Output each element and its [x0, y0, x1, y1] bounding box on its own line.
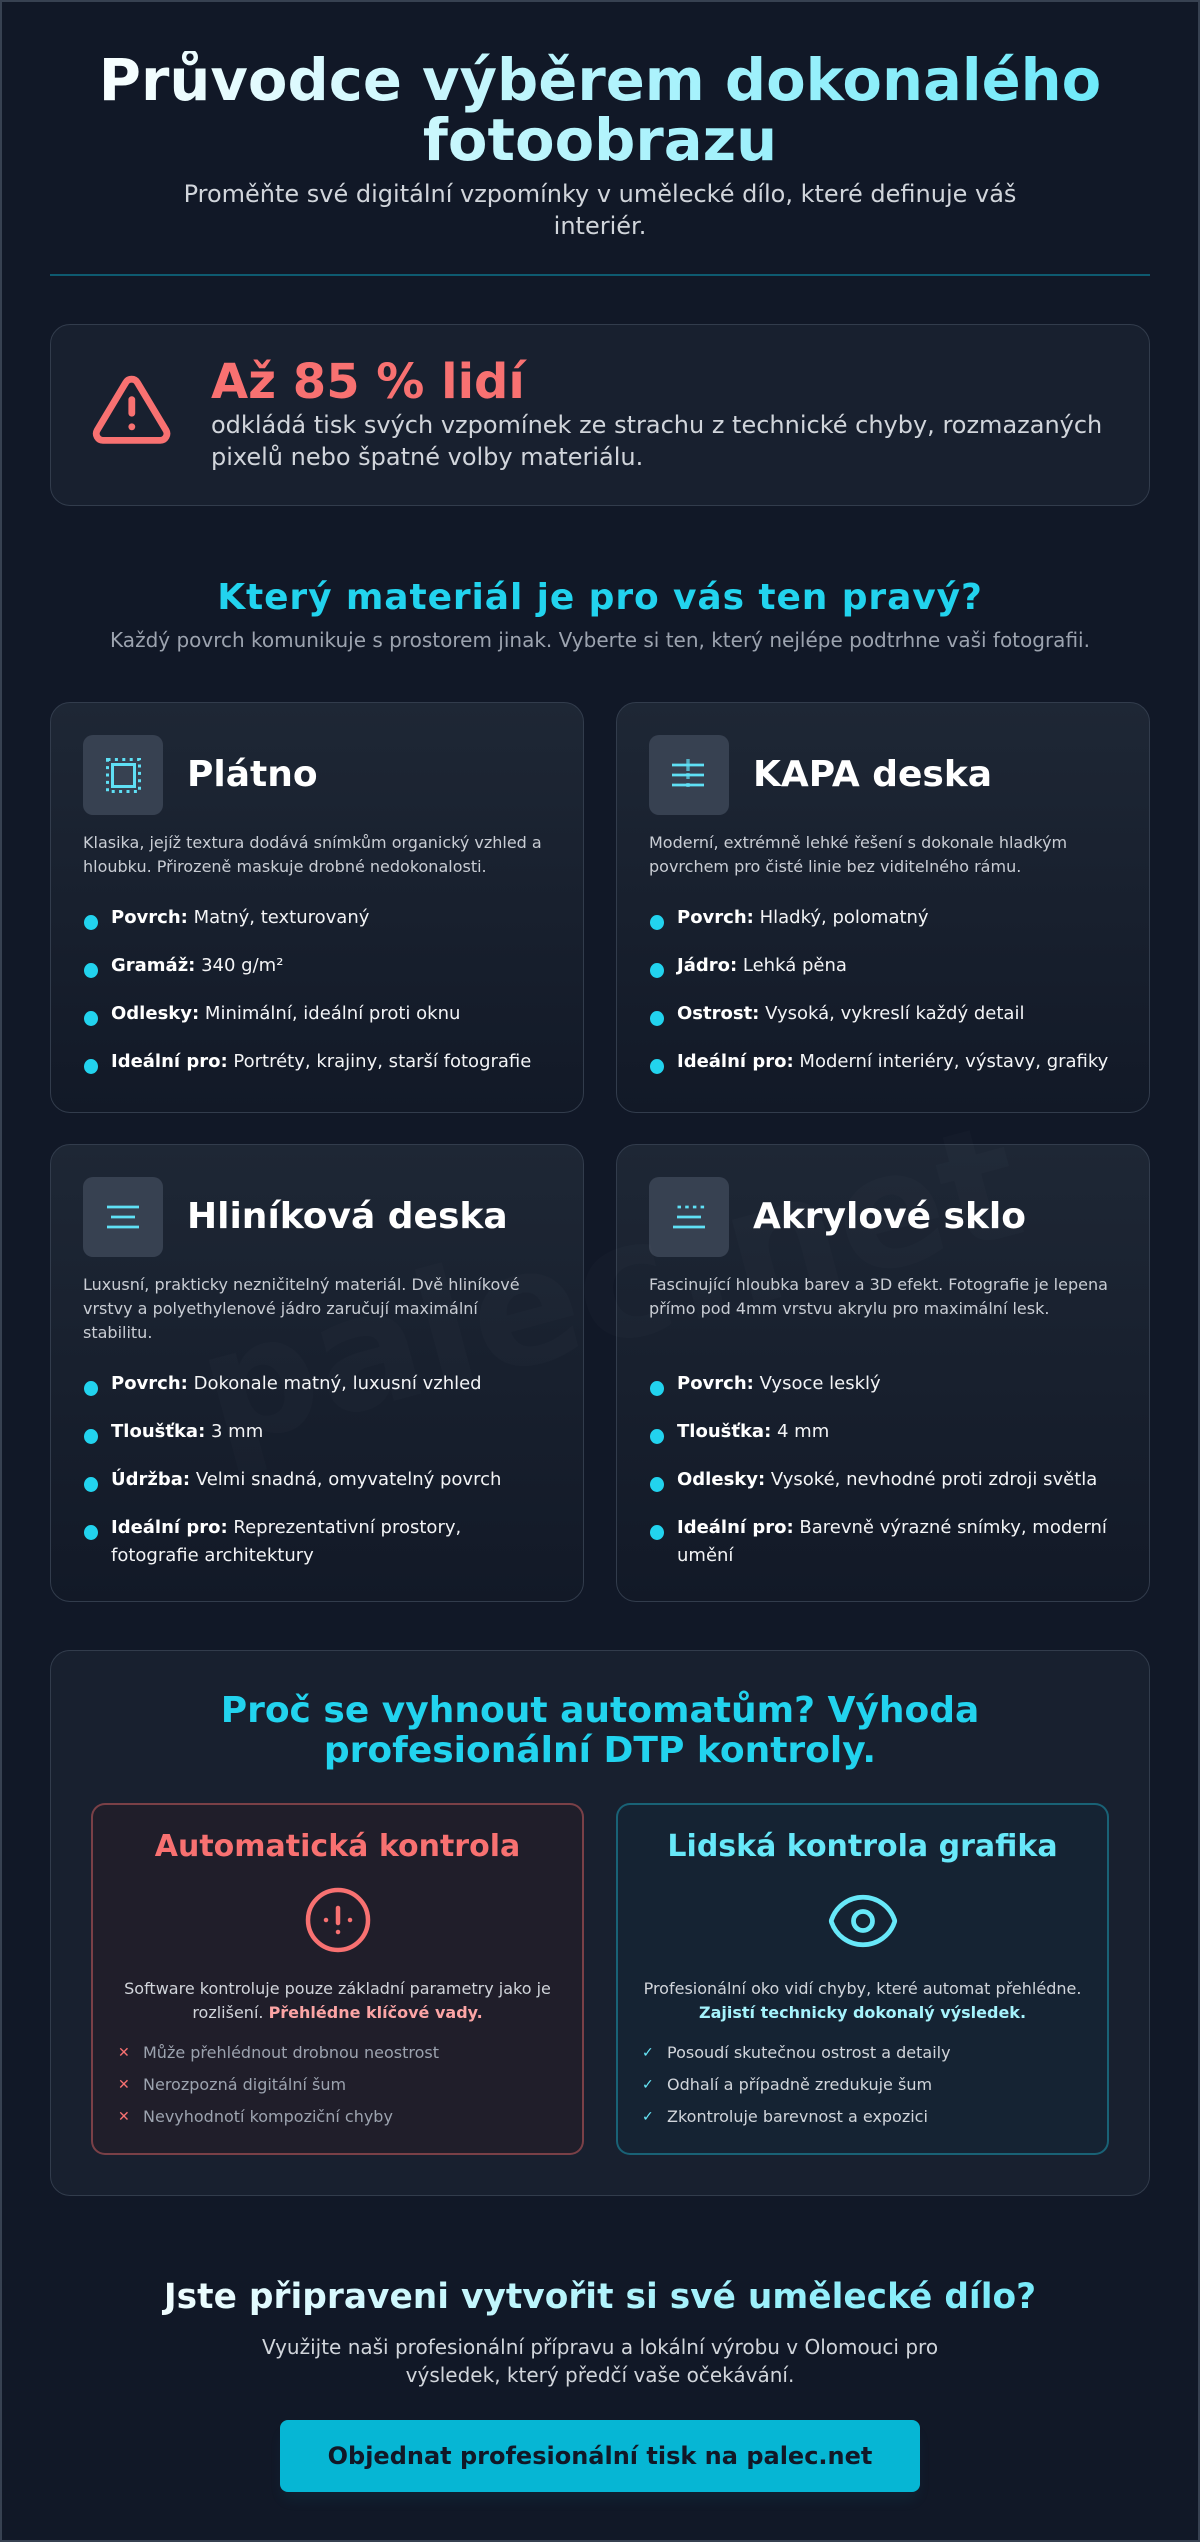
- spec: thickness: Tloušťka: 4 mm: [677, 1421, 829, 1442]
- body text: Profesionální oko vidí chyby, které automat přehlédne.: [644, 1979, 1081, 1998]
- card title: Plátno: [187, 754, 318, 795]
- spec: surface: Povrch: Dokonale matný, luxusní vzhled: [111, 1373, 482, 1394]
- spec: ideal for: Ideální pro: Portréty, krajiny, starší fotografie: [111, 1051, 531, 1072]
- description: [649, 1275, 1108, 1318]
- benefit 2: Odhalí a případně zredukuje šum: [667, 2075, 932, 2094]
- benefit 1: Posoudí skutečnou ostrost a detaily: [667, 2043, 951, 2062]
- spec: ideal for: fotografie architektury: [111, 1545, 314, 1566]
- closing heading: Jste připraveni vytvořit si své umělecké dílo?: [164, 2277, 1036, 2317]
- icon: acrylic layers: [649, 1177, 729, 1257]
- statistic text: odkládá tisk svých vzpomínek ze strachu z technické chyby, rozmazaných: [211, 411, 1102, 439]
- icon: canvas: [83, 735, 163, 815]
- spec: maintenance: Údržba: Velmi snadná, omyvatelný povrch: [111, 1469, 501, 1490]
- description: [83, 833, 542, 876]
- spec: ideal for: umění: [677, 1545, 733, 1566]
- statistic text: pixelů nebo špatné volby materiálu.: [211, 443, 643, 471]
- drawback 1: Může přehlédnout drobnou neostrost: [143, 2043, 439, 2062]
- body text: [644, 1979, 1081, 2022]
- description: vrstvy a polyethylenové jádro zaručují maximální: [83, 1299, 478, 1318]
- panel: automatic check: ✕: [118, 2109, 130, 2125]
- panel: human check: [616, 1803, 1109, 2155]
- drawback 3: Nevyhodnotí kompoziční chyby: [143, 2107, 393, 2126]
- spec: surface: Povrch: Matný, texturovaný: [111, 907, 369, 928]
- call to action button: [280, 2420, 920, 2492]
- description: povrchem pro čisté linie bez viditelného rámu.: [649, 857, 1021, 876]
- panel: comparison: [50, 1650, 1150, 2196]
- benefit 3: Zkontroluje barevnost a expozici: [667, 2107, 928, 2126]
- description: hloubku. Přirozeně maskuje drobné nedokonalosti.: [83, 857, 487, 876]
- spec: surface: Povrch: Hladký, polomatný: [677, 907, 929, 928]
- description: přímo pod 4mm vrstvu akrylu pro maximální lesk.: [649, 1299, 1049, 1318]
- comparison heading: [221, 1690, 979, 1771]
- statistic text: [211, 411, 1102, 471]
- panel: automatic check: ✕: [118, 2077, 130, 2093]
- title: Průvodce výběrem dokonalého: [99, 47, 1101, 114]
- icon: aluminium layers: [83, 1177, 163, 1257]
- panel: statistic alert: [50, 324, 1150, 506]
- subtitle: [184, 180, 1016, 240]
- comparison heading: profesionální DTP kontroly.: [324, 1730, 876, 1771]
- spec: thickness: Tloušťka: 3 mm: [111, 1421, 263, 1442]
- spec: core: Jádro: Lehká pěna: [677, 955, 847, 976]
- body text: Software kontroluje pouze základní parametry jako je: [124, 1979, 551, 1998]
- panel: automatic check: [91, 1803, 584, 2155]
- panel: KAPA board: [616, 702, 1150, 1113]
- body text: rozlišení. Přehlédne klíčové vady.: [192, 2003, 483, 2022]
- body text: [124, 1979, 551, 2022]
- drawback 2: Nerozpozná digitální šum: [143, 2075, 346, 2094]
- subtitle: interiér.: [554, 212, 646, 240]
- icon: KAPA layers: [649, 735, 729, 815]
- comparison heading: Proč se vyhnout automatům? Výhoda: [221, 1690, 979, 1731]
- statistic heading: Až 85 % lidí: [211, 354, 525, 410]
- spec: ideal for: Ideální pro: Moderní interiéry, výstavy, grafiky: [677, 1051, 1108, 1072]
- section heading: Který materiál je pro vás ten pravý?: [217, 577, 983, 618]
- card title: Akrylové sklo: [753, 1196, 1026, 1237]
- spec: reflections: Odlesky: Vysoké, nevhodné proti zdroji světla: [677, 1469, 1097, 1490]
- title: fotoobrazu: [423, 107, 777, 174]
- icon: alert circle: [306, 1888, 370, 1952]
- description: Fascinující hloubka barev a 3D efekt. Fotografie je lepena: [649, 1275, 1108, 1294]
- spec: sharpness: Ostrost: Vysoká, vykreslí každý detail: [677, 1003, 1024, 1024]
- spec: ideal for: [84, 1517, 461, 1566]
- closing text: Využijte naši profesionální přípravu a lokální výrobu v Olomouci pro: [262, 2335, 938, 2359]
- description: Luxusní, prakticky nezničitelný materiál. Dvě hliníkové: [83, 1275, 520, 1294]
- panel: human check: ✓: [642, 2109, 654, 2125]
- card title: KAPA deska: [753, 754, 992, 795]
- description: Moderní, extrémně lehké řešení s dokonale hladkým: [649, 833, 1067, 852]
- icon: warning triangle: [92, 376, 170, 444]
- card title: Hliníková deska: [187, 1196, 508, 1237]
- panel: automatic check: ✕: [118, 2045, 130, 2061]
- description: Klasika, jejíž textura dodává snímkům organický vzhled a: [83, 833, 542, 852]
- spec: reflections: Odlesky: Minimální, ideální proti oknu: [111, 1003, 460, 1024]
- panel: aluminium board: [50, 1144, 584, 1602]
- spec: ideal for: Ideální pro: Reprezentativní prostory,: [111, 1517, 461, 1538]
- call to action button: Objednat profesionální tisk na palec.net: [328, 2442, 872, 2470]
- spec: surface: Povrch: Vysoce lesklý: [677, 1373, 881, 1394]
- description: [83, 1275, 520, 1342]
- subtitle: Proměňte své digitální vzpomínky v umělecké dílo, které definuje váš: [184, 180, 1016, 208]
- panel: human check: ✓: [642, 2045, 654, 2061]
- closing text: [262, 2335, 938, 2387]
- subheading: Automatická kontrola: [155, 1829, 520, 1864]
- title: [99, 47, 1101, 174]
- description: [649, 833, 1067, 876]
- spec: ideal for: [650, 1517, 1108, 1566]
- panel: acrylic glass: [616, 1144, 1150, 1602]
- section subheading: Každý povrch komunikuje s prostorem jinak. Vyberte si ten, který nejlépe podtrhne vaši fotografii.: [110, 628, 1090, 652]
- panel: canvas: [50, 702, 584, 1113]
- spec: weight: Gramáž: 340 g/m²: [111, 955, 283, 976]
- watermark: palec.net: [180, 1086, 1040, 1485]
- icon: eye: [828, 1894, 898, 1948]
- subheading: Lidská kontrola grafika: [667, 1829, 1058, 1864]
- spec: ideal for: Ideální pro: Barevně výrazné snímky, moderní: [677, 1517, 1107, 1538]
- panel: human check: ✓: [642, 2077, 654, 2093]
- description: stabilitu.: [83, 1323, 152, 1342]
- body text: Zajistí technicky dokonalý výsledek.: [699, 2003, 1026, 2022]
- closing text: výsledek, který předčí vaše očekávání.: [406, 2363, 794, 2387]
